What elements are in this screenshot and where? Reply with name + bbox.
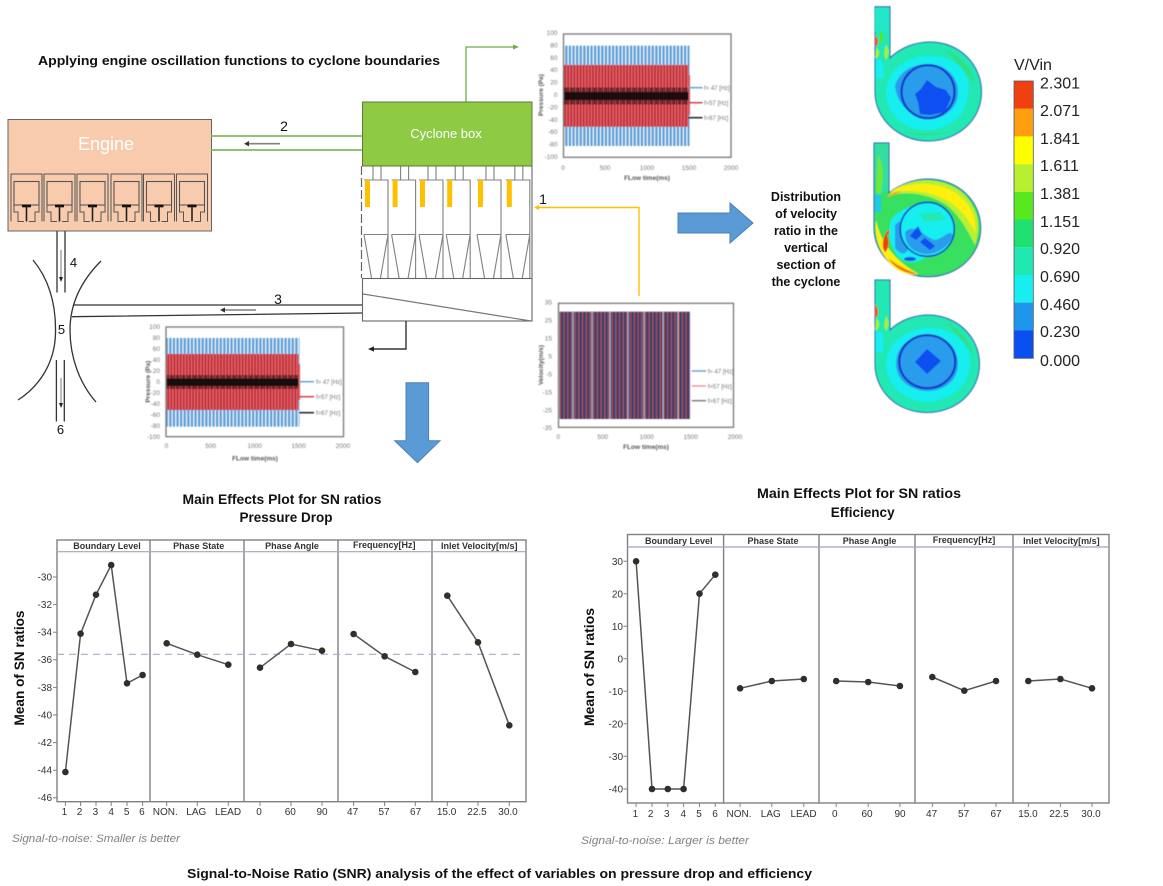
x axis labels: 4 (681, 809, 687, 820)
y axis labels: -30 (38, 572, 52, 584)
x axis labels: 15.0 (437, 807, 457, 818)
panel: engine (8, 120, 212, 231)
chart axes labels: -60 (548, 129, 558, 136)
text: distribution of velocity ratio: section of (776, 258, 836, 272)
chart axes labels: 500 (600, 165, 611, 172)
x axis labels: 60 (861, 809, 873, 820)
engine label: Engine (78, 134, 134, 154)
inlet swirl (875, 304, 889, 352)
chart legend: f=67 [Hz] (704, 116, 729, 122)
chart: main effects for pressure drop (11, 540, 526, 818)
chart axes labels: -80 (548, 142, 558, 148)
y axis labels: 30 (612, 557, 623, 568)
chart axes labels: -80 (151, 423, 160, 430)
chart legend: f=67 [Hz] (316, 411, 341, 417)
legend title: V/Vin (1014, 57, 1052, 74)
chart axes labels: -100 (544, 154, 558, 161)
chart axes labels: -100 (147, 434, 160, 441)
chart axes labels: 100 (547, 30, 558, 37)
y axis labels: 10 (612, 622, 623, 633)
x axis labels: 67 (410, 807, 422, 818)
chart axes labels: 20 (153, 368, 160, 375)
y axis labels: -30 (609, 752, 623, 763)
y axis labels: -38 (38, 683, 52, 694)
y axis labels (38, 572, 52, 804)
legend labels: 0.460 (1040, 297, 1080, 314)
x axis labels: 47 (347, 807, 359, 818)
facet headers: Inlet Velocity[m/s] (441, 541, 518, 551)
chart axes labels: 40 (153, 357, 160, 364)
series lines (65, 565, 509, 772)
chart axes labels (538, 30, 739, 182)
x axis labels: 2 (648, 809, 654, 820)
arrow: blue down (395, 383, 440, 463)
chart axes labels: 40 (550, 67, 558, 74)
connection 2: green pipe cyclone to engine: 2 (280, 118, 288, 134)
legend labels: 0.230 (1040, 324, 1080, 341)
x axis labels: 1 (62, 807, 68, 818)
chart legend: f= 47 [Hz] (704, 86, 730, 92)
x axis labels: 90 (894, 809, 906, 820)
y axis labels: -40 (609, 784, 623, 796)
y axis labels: -42 (38, 738, 52, 749)
x axis labels (62, 807, 518, 818)
chart axes labels: -20 (548, 104, 558, 112)
chart axes labels: 5 (548, 354, 552, 360)
connection 1: yellow inlet arrow (534, 191, 639, 296)
plot frame (53, 540, 526, 806)
x axis labels: NON. (726, 809, 752, 820)
chart axes labels: 1000 (639, 434, 654, 441)
text: distribution of velocity ratio: the cyclone (772, 275, 840, 289)
hopper (362, 278, 532, 321)
chart axes labels: 2000 (336, 443, 351, 450)
chart axes labels: 1500 (291, 443, 306, 450)
legend labels (1040, 76, 1080, 370)
chart axes labels: 25 (545, 318, 552, 324)
chart axes labels: Pressure (Pa) (538, 74, 545, 116)
chart: main effects for efficiency (581, 534, 1109, 820)
legend labels: 1.381 (1040, 186, 1080, 203)
heading: pressure drop plot (182, 492, 382, 525)
x axis labels: 22.5 (1049, 809, 1069, 820)
x axis labels: 90 (316, 807, 328, 818)
chart axes labels: FLow time(ms) (624, 175, 670, 182)
chart legend: f=67 [Hz] (708, 399, 732, 405)
chart axes labels: 0 (156, 379, 160, 386)
chart legend: f= 47 [Hz] (708, 370, 734, 376)
x axis labels: 6 (139, 807, 145, 818)
chart plot waveforms (558, 303, 734, 427)
chart axes labels: Pressure (Pa) (145, 361, 152, 403)
panel: venturi with pipes 4, 5, 6: 4 (70, 255, 77, 270)
legend labels: 1.841 (1040, 131, 1080, 148)
x axis labels: 0 (256, 807, 262, 818)
text: distribution of velocity ratio: of velocity (775, 207, 837, 221)
y axis labels: -40 (38, 710, 52, 722)
y axis labels: -10 (609, 687, 623, 698)
chart axes labels: 1000 (640, 165, 655, 172)
x axis labels: 47 (926, 809, 938, 820)
chart axes labels: FLow time(ms) (623, 444, 669, 451)
chart axes labels: 15 (545, 336, 552, 342)
chart axes labels: 20 (550, 80, 558, 86)
chart: pressure at exhaust (145, 324, 351, 462)
chart axes labels: 80 (153, 335, 160, 342)
x axis labels: 0 (832, 809, 838, 820)
velocity bands (886, 50, 975, 135)
chart axes labels: 0 (554, 92, 558, 99)
x axis labels: 60 (285, 807, 296, 818)
facet headers: Inlet Velocity[m/s] (1023, 536, 1100, 546)
x axis labels: LAG (186, 807, 207, 818)
x axis labels: 57 (958, 809, 970, 820)
plot frame (624, 534, 1109, 807)
inlet streaks (874, 144, 888, 212)
legend labels: 1.151 (1040, 214, 1080, 231)
x axis labels: 6 (712, 809, 718, 820)
facet headers (645, 535, 1100, 546)
title: applying oscillation functions: Applying engine oscillation functions to cyclone boundaries (38, 53, 440, 68)
x axis labels: 22.5 (467, 807, 487, 818)
chart legend: f=57 [Hz] (704, 101, 729, 107)
panel: venturi with pipes 4, 5, 6: 5 (58, 322, 65, 337)
y axis labels: -44 (38, 766, 52, 776)
x axis labels: 30.0 (1081, 809, 1101, 820)
x axis labels: NON. (153, 807, 178, 818)
chart axes labels: 500 (597, 434, 609, 441)
chart axes labels (538, 300, 743, 451)
y axis labels: -20 (609, 720, 623, 730)
chart axes labels: 0 (165, 443, 169, 450)
chart axes labels: 60 (550, 55, 558, 62)
x axis labels: 67 (990, 809, 1002, 820)
facet headers: Phase Angle (265, 541, 319, 551)
legend labels: 2.071 (1040, 103, 1080, 120)
chart axes labels: -40 (151, 401, 160, 408)
chart legend (692, 370, 734, 405)
chart axes labels: 1500 (683, 434, 698, 441)
facet headers: Frequency[Hz] (353, 540, 416, 550)
heading: efficiency plot: Main Effects Plot for SN ratios (757, 486, 961, 501)
chart axes labels: -15 (543, 390, 552, 396)
panel: CFD contour bottom (875, 280, 980, 412)
cyclone units (362, 166, 532, 278)
chart axes labels (145, 324, 351, 462)
note: larger is better: Signal-to-noise: Larger is better (581, 835, 750, 847)
chart axes labels: -60 (151, 412, 160, 419)
series lines (636, 561, 1092, 789)
x axis labels: 5 (124, 807, 130, 818)
x axis labels: 1 (633, 809, 639, 820)
chart axes labels: 2000 (728, 434, 743, 441)
chart legend: f=57 [Hz] (708, 384, 732, 390)
heading: efficiency plot (757, 486, 961, 520)
legend labels: 1.611 (1040, 158, 1079, 175)
chart legend (688, 86, 730, 122)
panel: CFD contour middle (874, 143, 981, 277)
hopper discharge arrow (368, 321, 406, 352)
chart axes labels: 80 (550, 42, 558, 50)
velocity bands (876, 180, 978, 275)
x axis labels: 57 (378, 807, 390, 818)
chart axes labels: 2000 (724, 165, 739, 172)
chart legend (299, 380, 342, 417)
series points (633, 558, 1095, 792)
x axis labels: 3 (93, 807, 99, 818)
chart axes labels: 100 (149, 324, 160, 331)
facet headers: Boundary Level (73, 541, 141, 551)
y axis title: Mean of SN ratios (11, 610, 27, 726)
text: distribution of velocity ratio: Distribution (771, 190, 841, 204)
connection 3: exhaust pipe (72, 291, 362, 317)
connection 2: green pipe cyclone to engine (211, 118, 362, 150)
chart axes labels: -25 (543, 408, 552, 414)
x axis labels: 4 (108, 807, 114, 818)
scroll body and inlet (874, 143, 981, 277)
colour legend: V/Vin (1014, 57, 1080, 370)
y axis labels (609, 557, 623, 796)
y axis labels: -32 (38, 600, 52, 611)
chart axes labels: Velocity(m/s) (538, 345, 545, 385)
text: distribution of velocity ratio: ratio in the (774, 224, 838, 238)
legend labels: 2.301 (1040, 76, 1080, 92)
connection 3: exhaust pipe: 3 (274, 291, 282, 307)
legend labels: 0.690 (1040, 269, 1080, 286)
chart axes labels: -20 (151, 390, 160, 397)
panel: CFD contour top (875, 7, 982, 141)
x axis labels: LAG (761, 809, 781, 820)
series points (62, 562, 513, 775)
chart axes labels: -35 (543, 425, 552, 432)
chart axes labels: 1500 (682, 165, 697, 172)
x axis labels (633, 809, 1101, 820)
chart plot waveforms (564, 34, 731, 157)
chart axes labels: 500 (205, 443, 217, 450)
scroll body and inlet (875, 7, 982, 141)
x axis labels: 30.0 (498, 807, 518, 818)
y axis labels: 0 (617, 654, 623, 666)
legend labels: 0.920 (1040, 241, 1080, 258)
facet headers: Boundary Level (645, 536, 713, 546)
cyclone box label: Cyclone box (410, 126, 482, 141)
chart axes labels: FLow time(ms) (232, 456, 278, 462)
connection 1: yellow inlet arrow: 1 (539, 191, 547, 207)
chart axes labels: 35 (545, 300, 552, 306)
inlet swirl (875, 8, 889, 78)
cyclone box (362, 102, 532, 166)
y axis title: Mean of SN ratios (581, 608, 597, 726)
velocity bands (886, 322, 974, 402)
facet headers: Phase Angle (843, 536, 896, 546)
heading: pressure drop plot: Main Effects Plot for SN ratios (182, 492, 382, 507)
x axis labels: LEAD (215, 807, 241, 818)
heading: pressure drop plot: Pressure Drop (239, 510, 333, 525)
y axis labels: 20 (612, 590, 623, 600)
facet headers: Frequency[Hz] (933, 535, 995, 545)
chart axes labels: 0 (561, 165, 565, 172)
engine cylinders (11, 174, 208, 222)
legend colour bar (1014, 81, 1033, 358)
chart axes labels: 60 (153, 346, 160, 353)
x axis labels: 3 (664, 809, 670, 820)
y axis labels: -46 (38, 793, 52, 804)
x axis labels: 5 (696, 809, 702, 820)
facet headers (73, 540, 518, 551)
scroll body and inlet (875, 280, 980, 412)
note: smaller is better: Signal-to-noise: Smaller is better (12, 833, 181, 845)
legend labels: 0.000 (1040, 353, 1080, 370)
arrow: blue right (678, 203, 753, 243)
chart: inlet velocity (538, 300, 743, 451)
text: distribution of velocity ratio: vertical (784, 241, 828, 255)
chart axes labels: -40 (548, 117, 558, 124)
chart legend: f= 47 [Hz] (316, 380, 342, 386)
chart: pressure at cyclone outlet (538, 30, 739, 182)
facet headers: Phase State (173, 541, 224, 551)
chart legend: f=57 [Hz] (316, 395, 341, 401)
chart axes labels: 0 (556, 434, 560, 441)
chart axes labels: 1000 (247, 443, 262, 450)
panel: cyclone battery (362, 102, 532, 321)
chart axes labels: -5 (546, 372, 552, 378)
chart plot waveforms (166, 327, 344, 437)
x axis labels: 2 (77, 807, 83, 818)
caption: SNR analysis: Signal-to-Noise Ratio (SNR) analysis of the effect of variables on pressure drop and efficiency (187, 867, 812, 881)
text: distribution of velocity ratio (771, 190, 841, 289)
y axis labels: -36 (38, 655, 52, 666)
green outlet arrow to pressure chart (466, 44, 519, 102)
x axis labels: 15.0 (1018, 809, 1038, 820)
y axis labels: -34 (38, 628, 52, 638)
x axis labels: LEAD (790, 809, 817, 820)
heading: efficiency plot: Efficiency (831, 505, 895, 520)
facet headers: Phase State (747, 536, 799, 546)
panel: venturi with pipes 4, 5, 6: 6 (57, 422, 64, 437)
panel: venturi with pipes 4, 5, 6 (18, 231, 101, 437)
